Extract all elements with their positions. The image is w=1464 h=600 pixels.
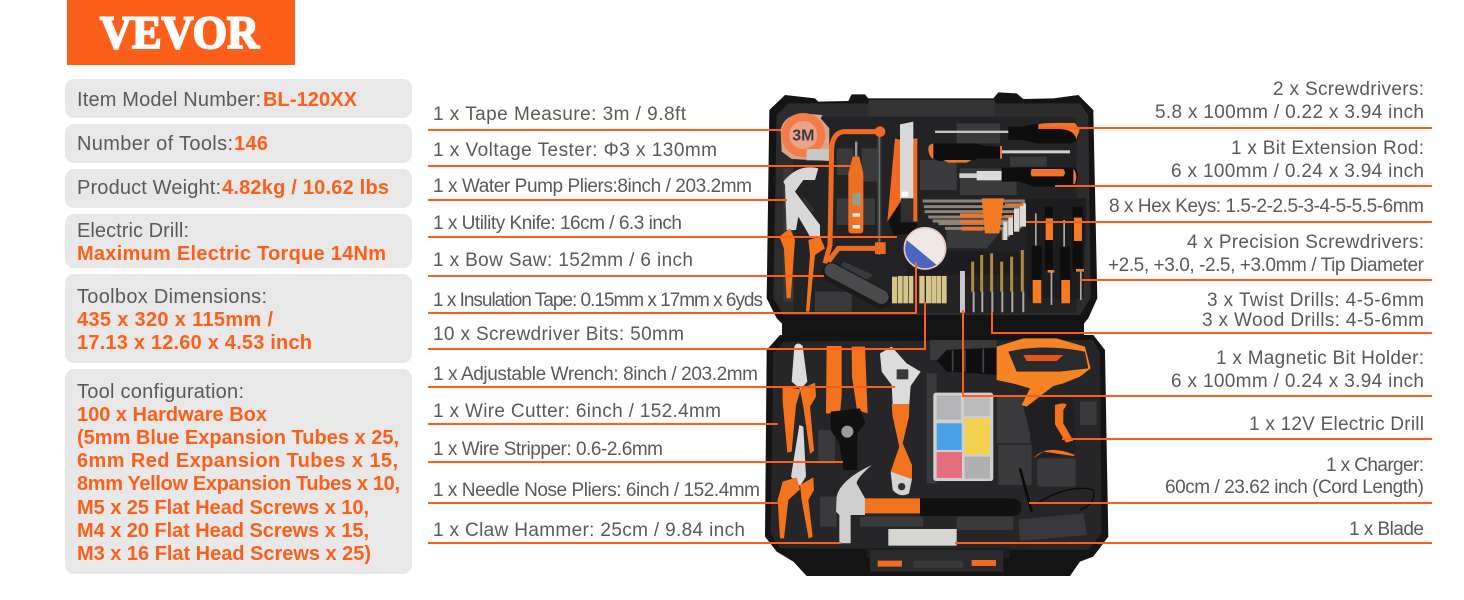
right callout: precision screwdrivers: 4 x Precision Screwdrivers: — [1187, 232, 1424, 253]
icon: combination pliers — [783, 343, 816, 454]
left callout: adjustable wrench: 1 x Adjustable Wrench: 8inch / 203.2mm — [433, 364, 758, 385]
panel: item model number: BL-120XX — [263, 89, 358, 111]
icon: tape measure — [781, 113, 829, 161]
icon: screwdriver two — [928, 143, 1070, 163]
icon: blade — [888, 529, 957, 546]
panel: item model number — [65, 79, 412, 118]
panel: product weight: 4.82kg / 10.62 lbs — [222, 177, 389, 199]
icon: charger — [1018, 468, 1094, 541]
icon: drill bits — [973, 250, 1023, 312]
icon: utility knife — [887, 122, 917, 235]
lower tray — [765, 332, 1108, 576]
icon: bow saw — [825, 126, 886, 299]
left callout: water pump pliers: 1 x Water Pump Pliers:8inch / 203.2mm — [433, 176, 752, 197]
panel: tool configuration: 8mm Yellow Expansion Tubes x 10, — [77, 473, 400, 495]
right callout: screwdrivers: 5.8 x 100mm / 0.22 x 3.94 inch — [1155, 102, 1424, 123]
panel: toolbox dimensions — [65, 274, 412, 363]
panel: item model number: Item Model Number: — [77, 89, 261, 111]
right callout: bit extension rod: 6 x 100mm / 0.24 x 3.94 inch — [1171, 161, 1424, 182]
panel: tool configuration: M3 x 16 Flat Head Screws x 25) — [77, 543, 371, 565]
right callout: twist and wood drills: 3 x Twist Drills: 4-5-6mm — [1207, 290, 1424, 311]
right callout: bit extension rod — [1055, 138, 1432, 186]
panel: number of tools — [65, 124, 412, 163]
toolbox photo illustration — [765, 92, 1108, 576]
right callout: precision screwdrivers: +2.5, +3.0, -2.5, +3.0mm / Tip Diameter — [1108, 255, 1425, 276]
right callout: hex keys: 8 x Hex Keys: 1.5-2-2.5-3-4-5-5.5-6mm — [1109, 196, 1424, 217]
right callout: screwdrivers — [1040, 79, 1432, 128]
right callout: magnetic bit holder: 1 x Magnetic Bit Holder: — [1216, 348, 1424, 369]
panel: electric drill: Electric Drill: — [77, 220, 189, 242]
right callout: screwdrivers: 2 x Screwdrivers: — [1273, 79, 1424, 100]
right callout: bit extension rod: 1 x Bit Extension Rod: — [1231, 138, 1424, 159]
left callout: insulation tape — [428, 262, 916, 313]
left callout: wire cutter: 1 x Wire Cutter: 6inch / 152.4mm — [433, 401, 721, 422]
icon: screwdriver bits — [892, 276, 947, 303]
left callout: bow saw: 1 x Bow Saw: 152mm / 6 inch — [433, 250, 693, 271]
right callout: twist and wood drills: 3 x Wood Drills: 4-5-6mm — [1202, 310, 1424, 331]
left callout: screwdriver bits — [428, 302, 925, 349]
icon: magnetic bit holder — [960, 271, 965, 313]
panel: toolbox dimensions: 435 x 320 x 115mm / — [77, 309, 273, 331]
panel: tool configuration: 100 x Hardware Box — [77, 404, 267, 426]
icon: voltage tester — [848, 142, 863, 233]
right callout: blade: 1 x Blade — [1349, 519, 1424, 540]
icon: water pump pliers — [779, 167, 825, 312]
panel: toolbox dimensions: Toolbox Dimensions: — [77, 286, 267, 308]
icon: wire stripper — [826, 346, 868, 470]
panel: product weight — [65, 169, 412, 208]
right callout: electric drill: 1 x 12V Electric Drill — [1249, 414, 1424, 435]
icon: insulation tape — [904, 228, 946, 269]
icon: bit extension rod — [959, 168, 1078, 187]
right callout: charger: 60cm / 23.62 inch (Cord Length) — [1165, 477, 1424, 498]
panel: tool configuration: Tool configuration: — [77, 381, 244, 403]
left callout: utility knife: 1 x Utility Knife: 16cm / 6.3 inch — [433, 213, 682, 234]
panel: number of tools: 146 — [234, 133, 268, 155]
left callout: insulation tape: 1 x Insulation Tape: 0.15mm x 17mm x 6yds — [433, 290, 763, 311]
panel: tool configuration: M4 x 20 Flat Head Screws x 15, — [77, 520, 369, 542]
panel: tool configuration — [65, 369, 412, 574]
icon: electric drill — [937, 338, 1091, 487]
right callout: precision screwdrivers — [1080, 232, 1432, 280]
logo: VEVOR — [67, 0, 295, 65]
icon: needle nose pliers — [778, 425, 814, 539]
left callout: wire stripper: 1 x Wire Stripper: 0.6-2.6mm — [433, 439, 663, 460]
panel: tool configuration: (5mm Blue Expansion Tubes x 25, — [77, 427, 399, 449]
right callout: charger: 1 x Charger: — [1326, 455, 1424, 476]
panel: toolbox dimensions: 17.13 x 12.60 x 4.53 inch — [77, 332, 312, 354]
left callout: tape measure: 1 x Tape Measure: 3m / 9.8ft — [433, 104, 687, 125]
right callout: charger — [1029, 455, 1432, 503]
upper tray — [767, 92, 1097, 328]
icon: precision screwdrivers — [1032, 207, 1084, 305]
icon: hex keys — [923, 198, 1026, 240]
right callout: magnetic bit holder — [963, 310, 1432, 396]
left callout: claw hammer: 1 x Claw Hammer: 25cm / 9.84 inch — [433, 520, 745, 541]
right callout: magnetic bit holder: 6 x 100mm / 0.24 x 3.94 inch — [1171, 371, 1424, 392]
panel: product weight: Product Weight: — [77, 177, 221, 199]
icon: tape measure: 3M — [792, 128, 814, 145]
panel: tool configuration: M5 x 25 Flat Head Screws x 10, — [77, 497, 369, 519]
panel: electric drill: Maximum Electric Torque 14Nm — [77, 243, 386, 265]
left callout: screwdriver bits: 10 x Screwdriver Bits: 50mm — [433, 324, 684, 345]
right callout: twist and wood drills — [992, 290, 1432, 333]
left callout: voltage tester: 1 x Voltage Tester: Φ3 x 130mm — [433, 140, 717, 161]
left callout: needle nose pliers: 1 x Needle Nose Pliers: 6inch / 152.4mm — [433, 480, 760, 501]
logo: VEVOR: VEVOR — [100, 7, 260, 59]
hinge between trays — [782, 318, 1084, 342]
panel: electric drill — [65, 214, 412, 268]
icon: hardware box — [933, 393, 993, 481]
icon: screwdriver one — [935, 123, 1080, 143]
icon: latches — [878, 560, 996, 567]
panel: number of tools: Number of Tools: — [77, 133, 233, 155]
panel: tool configuration: 6mm Red Expansion Tubes x 15, — [77, 450, 398, 472]
icon: adjustable wrench — [880, 347, 921, 495]
icon: claw hammer — [836, 465, 1022, 543]
